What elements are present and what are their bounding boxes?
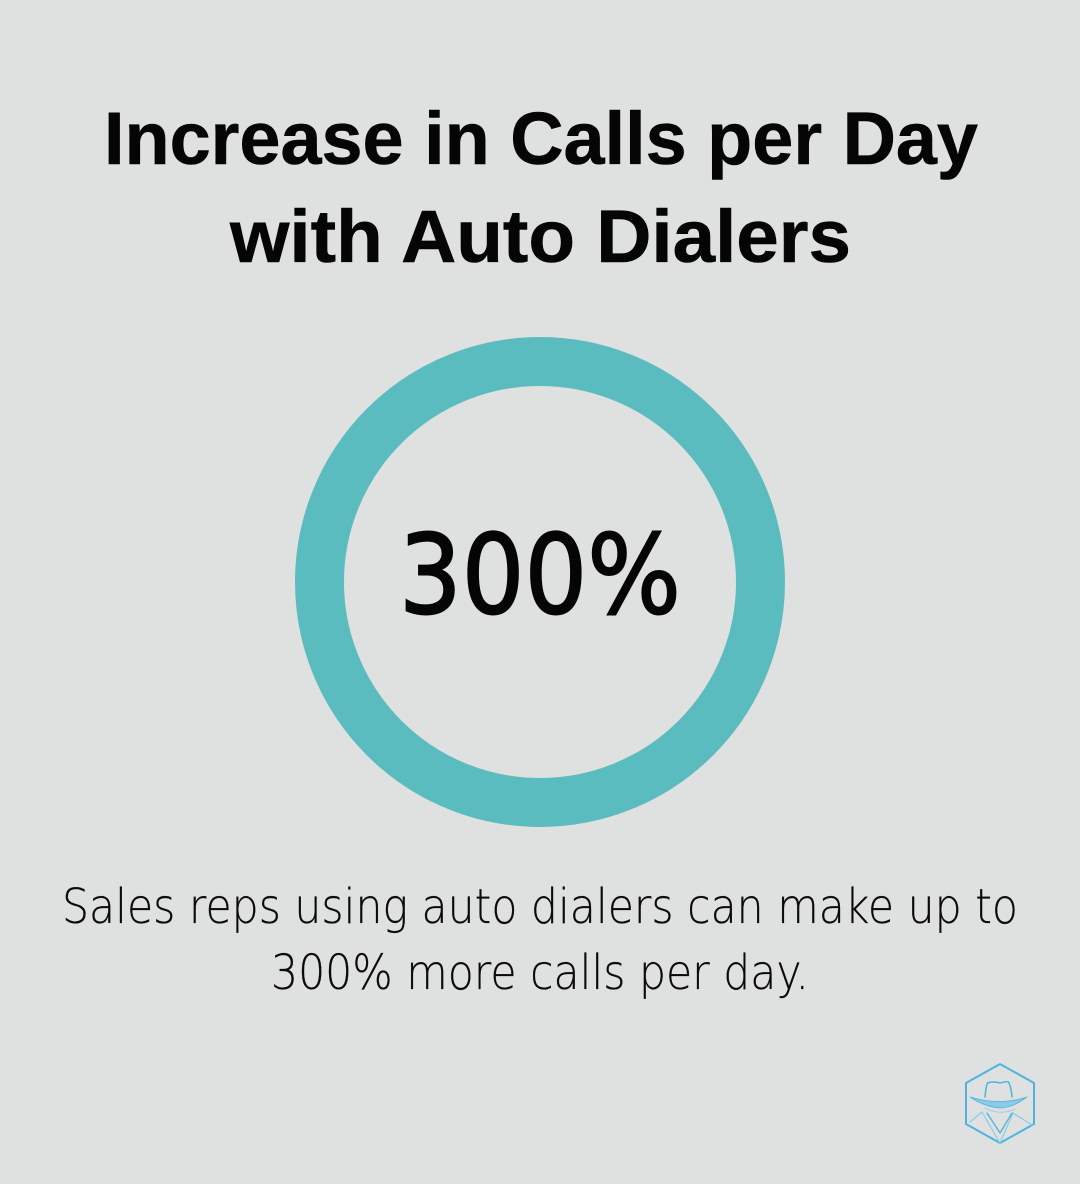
- title: Increase in Calls per Day: [104, 97, 978, 180]
- description text: 300% more calls per day.: [271, 945, 809, 1001]
- donut ring: [320, 362, 760, 802]
- central statistic: 300%: 300%: [399, 511, 681, 639]
- icon: hexagon logo with hat spy: [966, 1064, 1034, 1143]
- description text: [62, 879, 1018, 1001]
- title: with Auto Dialers: [229, 195, 851, 278]
- title: [104, 97, 978, 278]
